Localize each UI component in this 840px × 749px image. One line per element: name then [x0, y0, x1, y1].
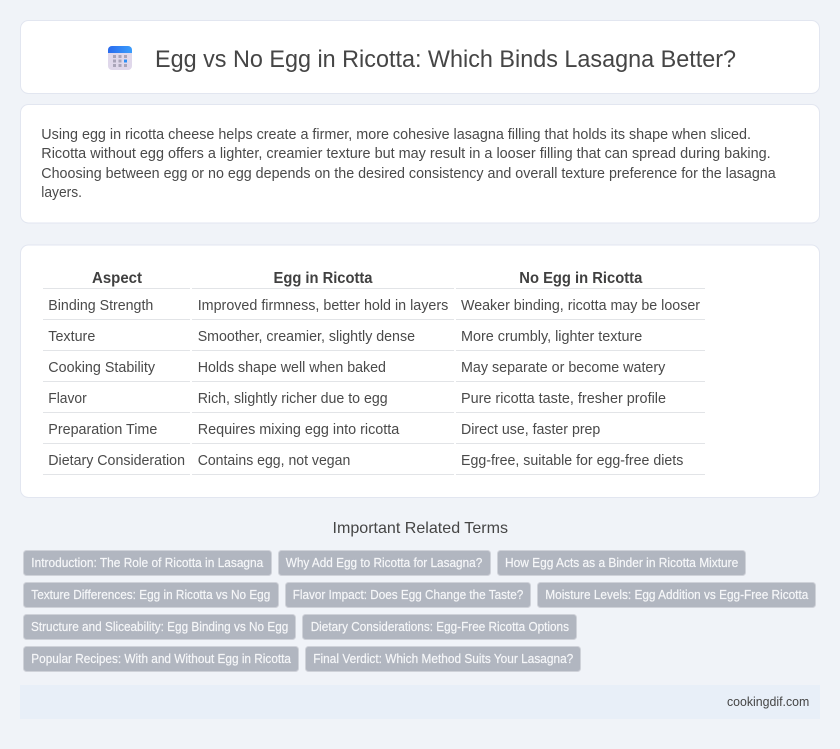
- table row: flavor: Flavor: [48, 391, 87, 407]
- tag: [302, 614, 576, 640]
- tag: Popular Recipes: With and Without Egg in Ricotta: [31, 651, 292, 666]
- table row: cooking stability: Cooking Stability: [48, 360, 156, 376]
- tag: [24, 582, 278, 608]
- tag: Texture Differences: Egg in Ricotta vs No Egg: [31, 587, 270, 602]
- table header row: [43, 270, 705, 289]
- tag: Structure and Sliceability: Egg Binding vs No Egg: [31, 619, 288, 634]
- panel: header: [20, 20, 820, 94]
- table row: cooking stability: May separate or become watery: [461, 360, 666, 376]
- table row: preparation time: Direct use, faster prep: [461, 422, 600, 438]
- tag: [306, 646, 580, 672]
- footer: [20, 685, 820, 719]
- table row: flavor: Rich, slightly richer due to egg: [198, 391, 388, 407]
- table header row: Egg in Ricotta: [274, 270, 373, 287]
- table row: preparation time: Requires mixing egg into ricotta: [198, 422, 399, 438]
- tag: [538, 582, 816, 608]
- table row: binding strength: Binding Strength: [48, 298, 153, 314]
- text block: introduction paragraph: [41, 127, 776, 201]
- table header row: Aspect: [92, 270, 143, 287]
- table row: flavor: [43, 391, 705, 413]
- table row: texture: Smoother, creamier, slightly dense: [198, 329, 415, 345]
- tag: [24, 614, 296, 640]
- tag: [24, 646, 298, 672]
- table row: dietary consideration: [43, 453, 705, 475]
- table row: preparation time: Preparation Time: [48, 422, 157, 438]
- table row: texture: More crumbly, lighter texture: [461, 329, 642, 345]
- table row: flavor: Pure ricotta taste, fresher profile: [461, 391, 666, 407]
- table row: dietary consideration: Egg-free, suitable for egg-free diets: [461, 453, 683, 469]
- text block: introduction paragraph: Using egg in ricotta cheese helps create a firmer, more cohesive lasagna filling that holds its shape when sliced.: [41, 127, 751, 143]
- tag: Flavor Impact: Does Egg Change the Taste?: [293, 587, 523, 602]
- title: Egg vs No Egg in Ricotta: Which Binds Lasagna Better?: [155, 46, 736, 73]
- table row: binding strength: Weaker binding, ricotta may be looser: [461, 298, 700, 314]
- text block: introduction paragraph: Ricotta without egg offers a lighter, creamier texture but may result in a looser filling that can spread during baking.: [41, 146, 771, 162]
- tag: Dietary Considerations: Egg-Free Ricotta Options: [311, 619, 569, 634]
- table row: dietary consideration: Contains egg, not vegan: [198, 453, 350, 469]
- tag: Moisture Levels: Egg Addition vs Egg-Free Ricotta: [545, 587, 809, 602]
- tag: Final Verdict: Which Method Suits Your Lasagna?: [313, 651, 573, 666]
- table row: binding strength: [43, 298, 705, 320]
- tag: [278, 550, 490, 576]
- table row: texture: [43, 329, 705, 351]
- footer source text: cookingdif.com: [727, 694, 809, 709]
- panel: introduction: [20, 104, 820, 223]
- table header row: No Egg in Ricotta: [519, 270, 642, 287]
- text block: introduction paragraph: Choosing between egg or no egg depends on the desired consistency and overall texture preference for the lasagna: [41, 166, 776, 182]
- tag: [24, 550, 272, 576]
- table row: dietary consideration: Dietary Consideration: [48, 453, 185, 469]
- table row: binding strength: Improved firmness, better hold in layers: [198, 298, 448, 314]
- text block: introduction paragraph: layers.: [41, 185, 82, 201]
- icon: calendar: [108, 46, 132, 70]
- tag: [286, 582, 530, 608]
- tag: How Egg Acts as a Binder in Ricotta Mixture: [505, 555, 738, 570]
- tag: Why Add Egg to Ricotta for Lasagna?: [286, 555, 482, 570]
- tag: [498, 550, 746, 576]
- table row: cooking stability: [43, 360, 705, 382]
- panel: comparison table: [20, 245, 820, 498]
- heading: important related terms: Important Related Terms: [332, 520, 508, 537]
- table row: texture: Texture: [48, 329, 95, 345]
- table row: cooking stability: Holds shape well when baked: [198, 360, 386, 376]
- related terms tag list: [24, 550, 816, 672]
- table row: preparation time: [43, 422, 705, 444]
- tag: Introduction: The Role of Ricotta in Lasagna: [31, 555, 264, 570]
